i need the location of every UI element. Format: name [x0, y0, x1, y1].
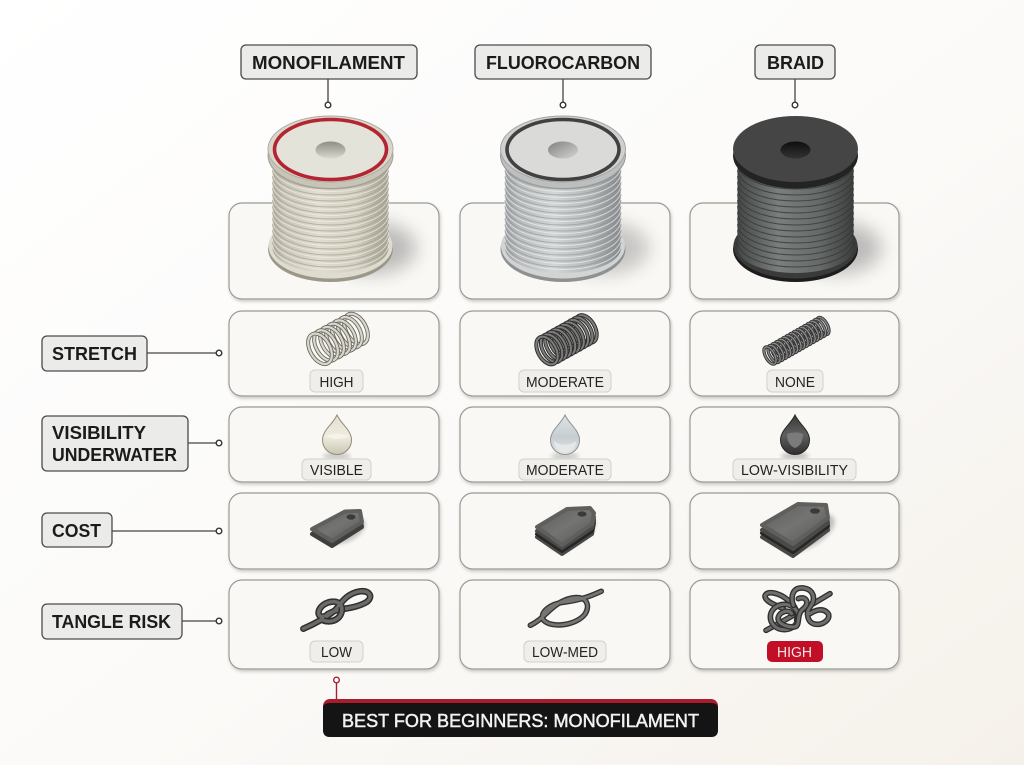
panel: tangle monofilament: [229, 580, 439, 669]
value pill: low: LOW: [321, 644, 353, 661]
icon: loose coil: [303, 310, 373, 368]
spool: fluorocarbon with dark ring: [500, 116, 649, 282]
panel: fluorocarbon spool card: [460, 203, 670, 299]
icon: tangled line: [765, 588, 830, 630]
panel: stretch fluorocarbon: [460, 311, 670, 396]
row label: stretch: [42, 336, 222, 371]
panel: stretch braid: [690, 311, 899, 396]
callout: best for beginners: BEST FOR BEGINNERS: MONOFILAMENT: [342, 710, 699, 731]
row label: tangle risk: [42, 604, 222, 639]
icon: large stacked price tags: [762, 504, 841, 560]
heading: monofilament: MONOFILAMENT: [252, 52, 406, 73]
value pill: low: [310, 641, 363, 662]
panel: visibility monofilament: [229, 407, 439, 482]
panel: tangle braid: [690, 580, 899, 669]
value pill: visible: [302, 459, 371, 480]
row label: stretch: STRETCH: [52, 343, 137, 364]
panel: cost braid: [690, 493, 899, 569]
icon: pale drop: [322, 415, 352, 459]
value pill: moderate: MODERATE: [526, 462, 604, 479]
icon: loose knot: [530, 591, 601, 625]
heading: braid: BRAID: [767, 52, 824, 73]
heading: fluorocarbon: FLUOROCARBON: [486, 52, 640, 73]
value pill: high: [310, 370, 363, 392]
row label: visibility underwater: UNDERWATER: [52, 444, 177, 465]
row label: tangle risk: TANGLE RISK: [52, 611, 172, 632]
row label: visibility underwater: VISIBILITY: [52, 422, 147, 443]
value pill: visible: VISIBLE: [310, 462, 363, 479]
row label: visibility underwater: [42, 416, 222, 471]
icon: medium coil: [532, 312, 601, 368]
panel: visibility fluorocarbon: [460, 407, 670, 482]
panel: cost monofilament: [229, 493, 439, 569]
icon: simple knot: [303, 591, 370, 629]
icon: translucent drop: [550, 415, 580, 459]
value pill: low-visibility: LOW-VISIBILITY: [741, 462, 848, 479]
heading: monofilament: [241, 45, 417, 108]
value pill: moderate: MODERATE: [526, 374, 604, 391]
heading: braid: [755, 45, 835, 108]
panel: cost fluorocarbon: [460, 493, 670, 569]
icon: single price tag: [312, 511, 369, 549]
callout: best for beginners: [323, 677, 718, 737]
value pill: none: [767, 370, 823, 392]
panel: stretch monofilament: [229, 310, 439, 396]
value pill: high risk in red: [767, 641, 823, 662]
panel: monofilament spool card: [229, 203, 439, 299]
row label: cost: [42, 513, 222, 547]
value pill: low-med: LOW-MED: [532, 644, 598, 661]
row label: cost: COST: [52, 520, 102, 541]
value pill: none: NONE: [775, 374, 815, 391]
value pill: high: HIGH: [320, 374, 354, 391]
spool: monofilament with red ring: [268, 116, 416, 282]
spool: braid: [733, 116, 882, 282]
panel: braid spool card: [690, 203, 899, 299]
icon: two stacked price tags: [537, 508, 601, 556]
icon: tight coil: [761, 316, 832, 366]
heading: fluorocarbon: [475, 45, 651, 108]
panel: visibility braid: [690, 407, 899, 482]
value pill: high risk in red: HIGH: [777, 644, 812, 661]
panel: tangle fluorocarbon: [460, 580, 670, 669]
icon: dark drop: [780, 415, 810, 459]
